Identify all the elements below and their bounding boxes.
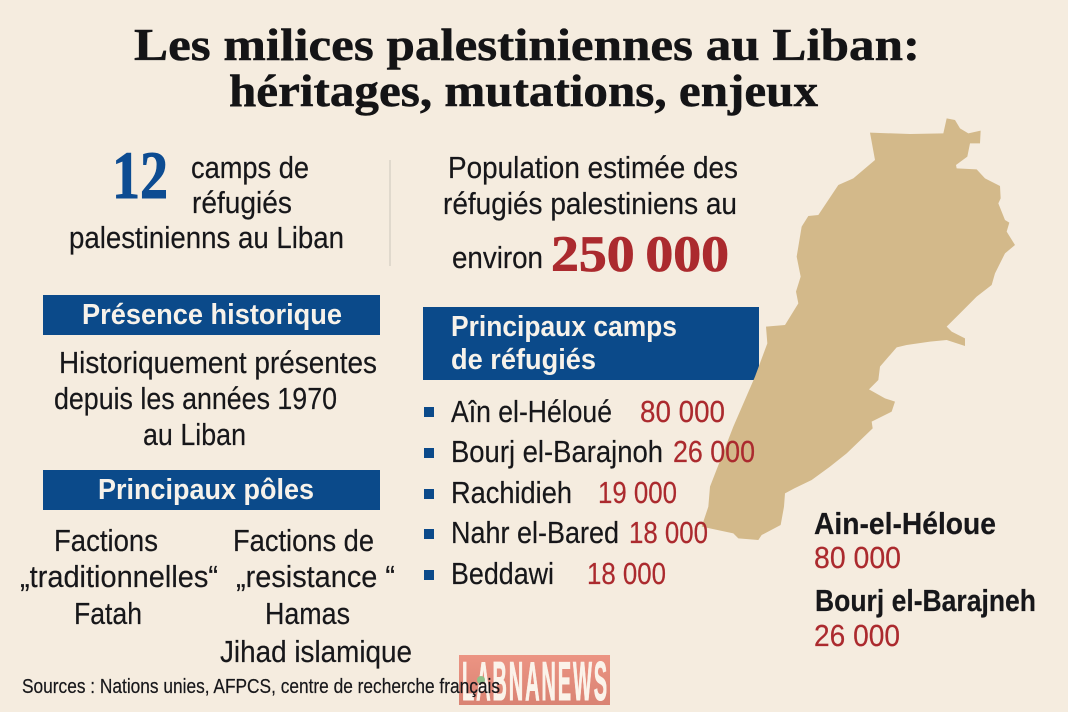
- text: factions de résistance: [220, 523, 412, 669]
- item: Rachidieh: Rachidieh: [451, 475, 572, 510]
- item: Bourj el-Barajnoh: 26 000: [673, 434, 755, 469]
- item: Aîn el-Héloué: 80 000: [640, 394, 725, 429]
- stat: population 250 000: réfugiés palestiniens au: [443, 186, 737, 221]
- stat: population 250 000: Population estimée des: [448, 150, 738, 185]
- item: Nahr el-Bared: [424, 515, 708, 550]
- text: présence historique: [54, 345, 377, 452]
- stat: population 250 000: [443, 150, 738, 283]
- text: factions de résistance: „resistance “: [236, 559, 395, 594]
- stat: 12 camps: camps de: [191, 150, 309, 185]
- map callout: Bourj el-Barajneh: [814, 583, 1036, 653]
- text: factions traditionnelles: [20, 523, 218, 631]
- text: factions traditionnelles: Factions: [54, 523, 158, 558]
- map callout: Ain-el-Héloue: 80 000: [814, 540, 901, 575]
- text: factions traditionnelles: „traditionnelles“: [20, 559, 218, 594]
- item: Beddawi: [424, 556, 666, 591]
- title: [134, 19, 920, 116]
- map callout: Bourj el-Barajneh: Bourj el-Barajneh: [815, 583, 1036, 618]
- item: Rachidieh: 19 000: [598, 475, 677, 510]
- stat: population 250 000: 250 000: [551, 227, 729, 283]
- item: Rachidieh: [424, 475, 677, 510]
- item: Aîn el-Héloué: [424, 394, 725, 429]
- map callout: Bourj el-Barajneh: 26 000: [814, 618, 900, 653]
- stat: 12 camps: réfugiés: [192, 185, 292, 220]
- heading: Présence historique: [43, 295, 380, 335]
- map: Lebanon: [702, 118, 1015, 540]
- text: présence historique: depuis les années 1970: [54, 381, 337, 416]
- title: Les milices palestiniennes au Liban:: [134, 19, 920, 70]
- map callout: Ain-el-Héloue: [814, 506, 996, 575]
- stat: population 250 000: environ: [452, 240, 543, 275]
- heading: Principaux camps de réfugiés: [423, 307, 759, 380]
- text: factions traditionnelles: Fatah: [74, 596, 142, 631]
- map callout: Ain-el-Héloue: Ain-el-Héloue: [814, 506, 996, 541]
- heading: Principaux pôles: Principaux pôles: [98, 474, 314, 506]
- list: principaux camps: [424, 394, 755, 591]
- item: Nahr el-Bared: Nahr el-Bared: [451, 515, 619, 550]
- title: héritages, mutations, enjeux: [229, 65, 818, 116]
- heading: Présence historique: Présence historique: [82, 299, 342, 331]
- text: factions de résistance: Hamas: [265, 596, 350, 631]
- logo: LibnaNews watermark: [459, 650, 610, 712]
- stat: 12 camps: 12: [112, 137, 168, 213]
- text: présence historique: Historiquement présentes: [59, 345, 377, 380]
- item: Beddawi: 18 000: [587, 556, 666, 591]
- item: Aîn el-Héloué: Aîn el-Héloué: [451, 394, 612, 429]
- item: Bourj el-Barajnoh: Bourj el-Barajnoh: [451, 434, 663, 469]
- text: factions de résistance: Factions de: [233, 523, 374, 558]
- heading: Principaux camps de réfugiés: de réfugiés: [451, 344, 596, 376]
- heading: Principaux pôles: [43, 470, 380, 510]
- item: Beddawi: Beddawi: [451, 556, 554, 591]
- sources: Sources : Nations unies, AFPCS, centre de recherche français: [22, 675, 500, 698]
- text: présence historique: au Liban: [143, 417, 246, 452]
- heading: Principaux camps de réfugiés: Principaux camps: [451, 311, 677, 343]
- stat: 12 camps: [69, 137, 344, 255]
- text: factions de résistance: Jihad islamique: [220, 634, 412, 669]
- stat: 12 camps: palestinienns au Liban: [69, 220, 344, 255]
- infographic canvas: LABNANEWS: [462, 650, 609, 712]
- item: Nahr el-Bared: 18 000: [629, 515, 708, 550]
